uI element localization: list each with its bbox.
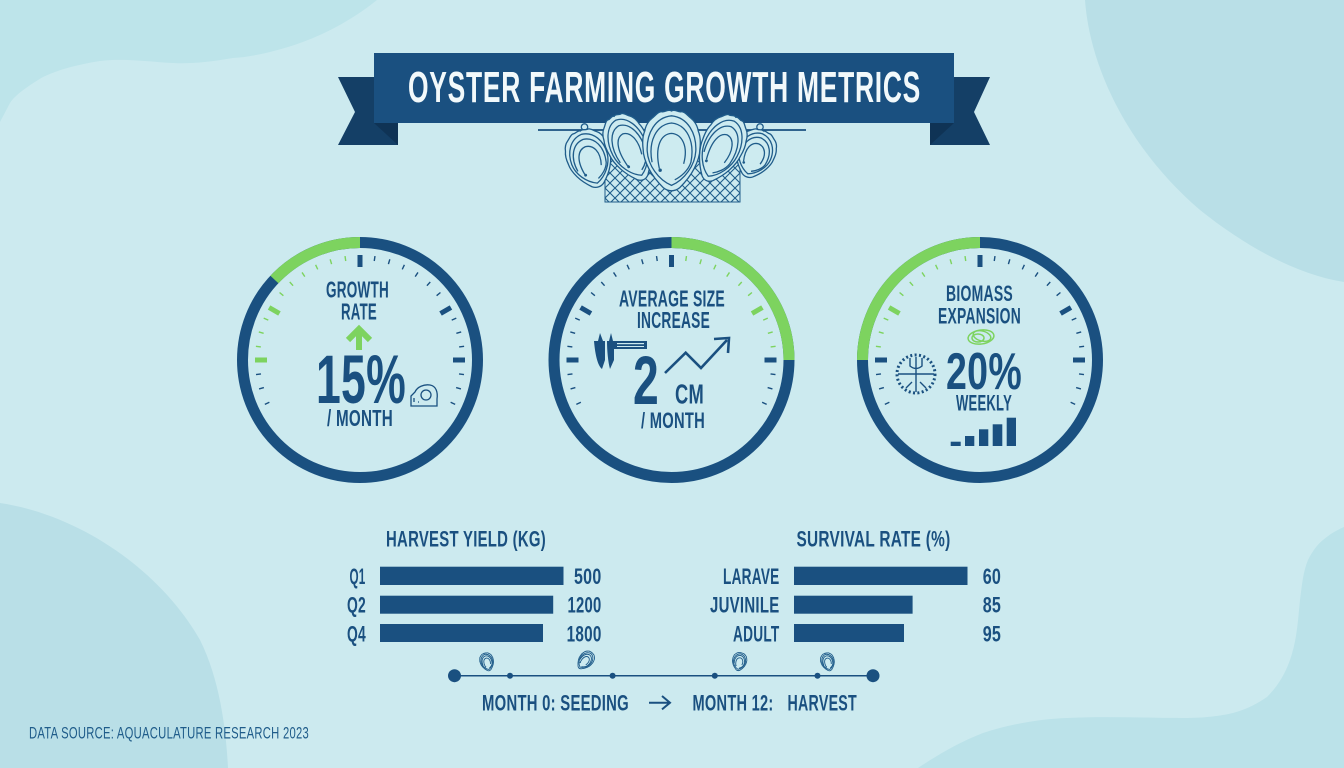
row larvae: 60 (983, 564, 1001, 589)
row larvae: LARAVE (723, 564, 780, 589)
background blob: bottom right (918, 527, 1344, 768)
banner left tail (338, 77, 398, 145)
icon: caliper (594, 333, 647, 369)
gauge ring (862, 242, 1098, 478)
background blob: top left (0, 0, 377, 122)
gauge ring (554, 242, 789, 478)
value: 15% (316, 341, 406, 418)
timeline (448, 648, 880, 716)
icon: trend arrow (665, 338, 729, 373)
timeline dots (448, 669, 880, 682)
title: OYSTER FARMING GROWTH METRICS (408, 64, 921, 112)
gauge: average size increase (554, 242, 789, 478)
oyster: inner right (687, 108, 755, 189)
ticks (566, 255, 776, 404)
timeline oysters (478, 648, 837, 673)
icon: up arrow (348, 329, 370, 350)
row adult: ADULT (733, 622, 780, 647)
oyster: outer right (728, 124, 782, 184)
banner right tail (930, 77, 990, 145)
ticks (255, 255, 465, 404)
row juvenile (710, 593, 1001, 618)
green arc (862, 242, 980, 360)
row Q1: 500 (574, 564, 602, 589)
row Q4: Q4 (347, 622, 366, 647)
chart: survival rate (710, 526, 1001, 647)
unit: / MONTH (641, 408, 705, 433)
oyster illustration with net (538, 107, 806, 202)
label line 2: INCREASE (637, 307, 710, 333)
value: 20% (946, 343, 1022, 401)
row Q2: 1200 (568, 593, 602, 618)
row Q4: 1800 (567, 622, 602, 647)
unit: WEEKLY (956, 390, 1012, 416)
title banner (338, 53, 990, 145)
chart: harvest yield (347, 526, 602, 647)
label: GROWTH (326, 276, 389, 302)
icon: dial (897, 355, 935, 393)
rope (538, 129, 806, 131)
timeline line (455, 675, 873, 677)
row adult (733, 622, 1001, 647)
banner left fold (374, 123, 398, 145)
chart heading: HARVEST YIELD (KG) (386, 526, 546, 552)
green arc (672, 242, 789, 360)
gauge ring (242, 242, 478, 478)
unit: / MONTH (327, 405, 393, 431)
background blob: top right (1085, 0, 1344, 282)
row Q1 (350, 564, 602, 589)
row Q4 (347, 622, 602, 647)
oyster: centre (643, 110, 700, 191)
oyster: inner left (595, 107, 663, 188)
ticks (875, 255, 1085, 404)
net border (605, 158, 740, 202)
green arc (274, 242, 360, 280)
label line 2: EXPANSION (938, 304, 1021, 328)
background blob: bottom left (0, 503, 228, 768)
icon: tape measure (411, 385, 437, 406)
label line 2: RATE (341, 298, 377, 324)
oyster: outer left (559, 124, 620, 194)
timeline end label: MONTH 12: (692, 690, 774, 716)
icon: green oyster scribble (967, 328, 995, 346)
value unit: CM (675, 378, 704, 410)
row juvenile: 85 (983, 593, 1001, 618)
oyster loops (581, 124, 763, 130)
banner ribbon (374, 53, 954, 123)
timeline start label: MONTH 0: SEEDING (482, 690, 629, 716)
row larvae (723, 564, 1001, 589)
gauge: biomass expansion (862, 242, 1098, 478)
row adult: 95 (983, 622, 1001, 647)
label: BIOMASS (946, 281, 1013, 306)
value: 2 (633, 342, 659, 419)
row juvenile: JUVINILE (710, 593, 780, 618)
row Q2: Q2 (347, 593, 366, 618)
banner right fold (930, 123, 954, 145)
chart heading: SURVIVAL RATE (%) (796, 526, 950, 552)
timeline harvest label: HARVEST (788, 690, 857, 716)
arrow (649, 696, 670, 709)
label: AVERAGE SIZE (619, 286, 725, 312)
icon: bars (951, 418, 1016, 446)
row Q1: Q1 (350, 564, 366, 589)
gauge: growth rate (242, 242, 478, 478)
net (605, 158, 740, 202)
row Q2 (347, 593, 602, 618)
data source: DATA SOURCE: AQUACULATURE RESEARCH 2023 (29, 724, 309, 742)
